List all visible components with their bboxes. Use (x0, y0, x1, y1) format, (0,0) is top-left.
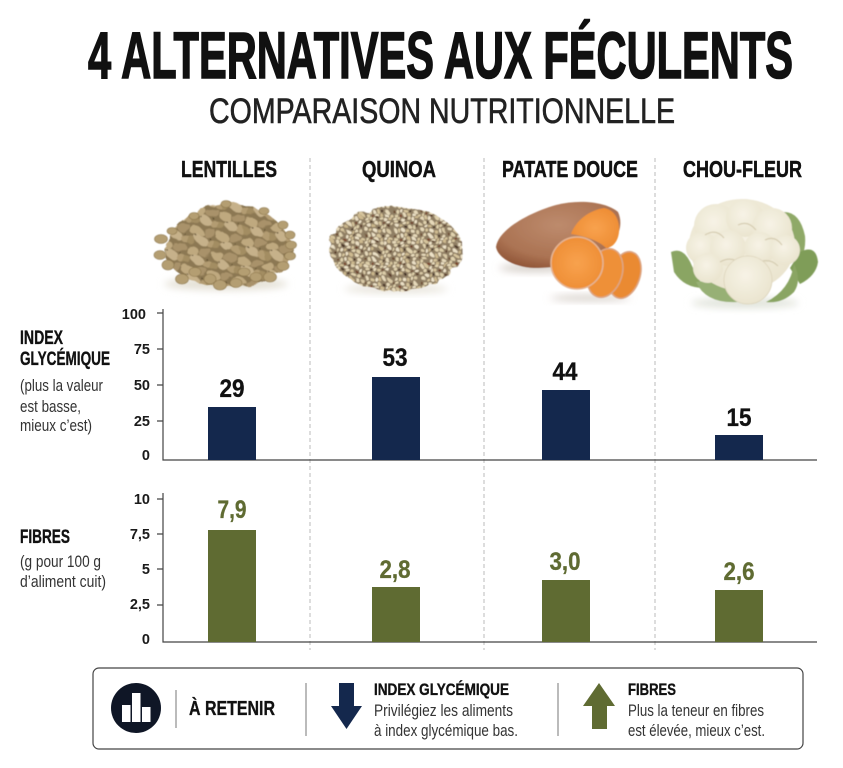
chart: index glycémique: 50 (134, 378, 150, 394)
image: sweet potato (496, 202, 647, 302)
image: lentils (154, 200, 296, 290)
bar: lentilles 29: 29 (220, 375, 244, 403)
chart: index glycémique: 25 (134, 414, 150, 430)
label: index glycémique: est basse, (20, 397, 81, 416)
bar: patate douce 3,0: 3,0 (550, 548, 580, 576)
text: index glycémique tip: INDEX GLYCÉMIQUE (374, 680, 509, 699)
chart: index glycémique (20, 307, 817, 464)
label: index glycémique (20, 328, 110, 435)
icon: bar chart badge (111, 683, 161, 733)
bar: quinoa 53 (372, 344, 420, 460)
bar: patate douce 44 (542, 358, 590, 460)
column heading: lentilles: LENTILLES (181, 156, 277, 182)
bar: patate douce 3,0 (542, 548, 590, 642)
bar: lentilles 7,9: 7,9 (218, 496, 246, 524)
column heading: chou-fleur: CHOU-FLEUR (683, 156, 802, 182)
label: index glycémique: INDEX (20, 328, 63, 349)
bar: patate douce 44: 44 (552, 358, 578, 386)
text: fibres tip (628, 681, 765, 740)
label: fibres (20, 527, 106, 591)
bar: chou-fleur 2,6 (715, 558, 763, 642)
text: fibres tip: Plus la teneur en fibres (628, 702, 764, 720)
label: fibres: FIBRES (20, 527, 70, 548)
chart: fibres: 0 (142, 632, 150, 648)
chart: index glycémique: 0 (142, 448, 150, 464)
chart: fibres: 2,5 (130, 597, 150, 613)
chart: fibres: 7,5 (130, 527, 150, 543)
image: cauliflower (671, 199, 818, 308)
bar: lentilles 7,9 (208, 496, 256, 642)
text: index glycémique tip: Privilégiez les aliments (374, 702, 513, 720)
bar: quinoa 2,8 (372, 556, 420, 642)
bar: quinoa 53: 53 (382, 344, 408, 372)
icon: down arrow (331, 683, 362, 729)
icon: up arrow (583, 683, 615, 729)
text: fibres tip: est élevée, mieux c’est. (628, 722, 765, 740)
label: index glycémique: mieux c’est) (20, 416, 92, 435)
bar: chou-fleur 15: 15 (726, 404, 752, 432)
label: index glycémique: (plus la valeur (20, 376, 103, 395)
bar: chou-fleur 2,6: 2,6 (724, 558, 754, 586)
chart: fibres (20, 492, 817, 648)
text: index glycémique tip: à index glycémique bas. (374, 722, 518, 740)
text: fibres tip: FIBRES (628, 681, 676, 699)
text: index glycémique tip (374, 680, 518, 740)
panel: à retenir (93, 668, 803, 749)
label: fibres: d’aliment cuit) (20, 572, 106, 591)
bar: lentilles 29 (208, 375, 256, 460)
column heading: patate douce: PATATE DOUCE (502, 156, 638, 182)
chart: fibres: 5 (142, 562, 150, 578)
chart: index glycémique: 75 (134, 342, 150, 358)
label: index glycémique: GLYCÉMIQUE (20, 348, 110, 370)
chart: index glycémique: 100 (122, 307, 146, 323)
subtitle: COMPARAISON NUTRITIONNELLE (209, 91, 675, 131)
bar: chou-fleur 15 (715, 404, 763, 460)
bar: quinoa 2,8: 2,8 (380, 556, 411, 584)
label: fibres: (g pour 100 g (20, 552, 101, 571)
column heading: quinoa: QUINOA (362, 156, 436, 182)
chart: fibres: 10 (134, 492, 150, 508)
image: quinoa (330, 207, 462, 293)
heading: à retenir: À RETENIR (189, 697, 275, 720)
